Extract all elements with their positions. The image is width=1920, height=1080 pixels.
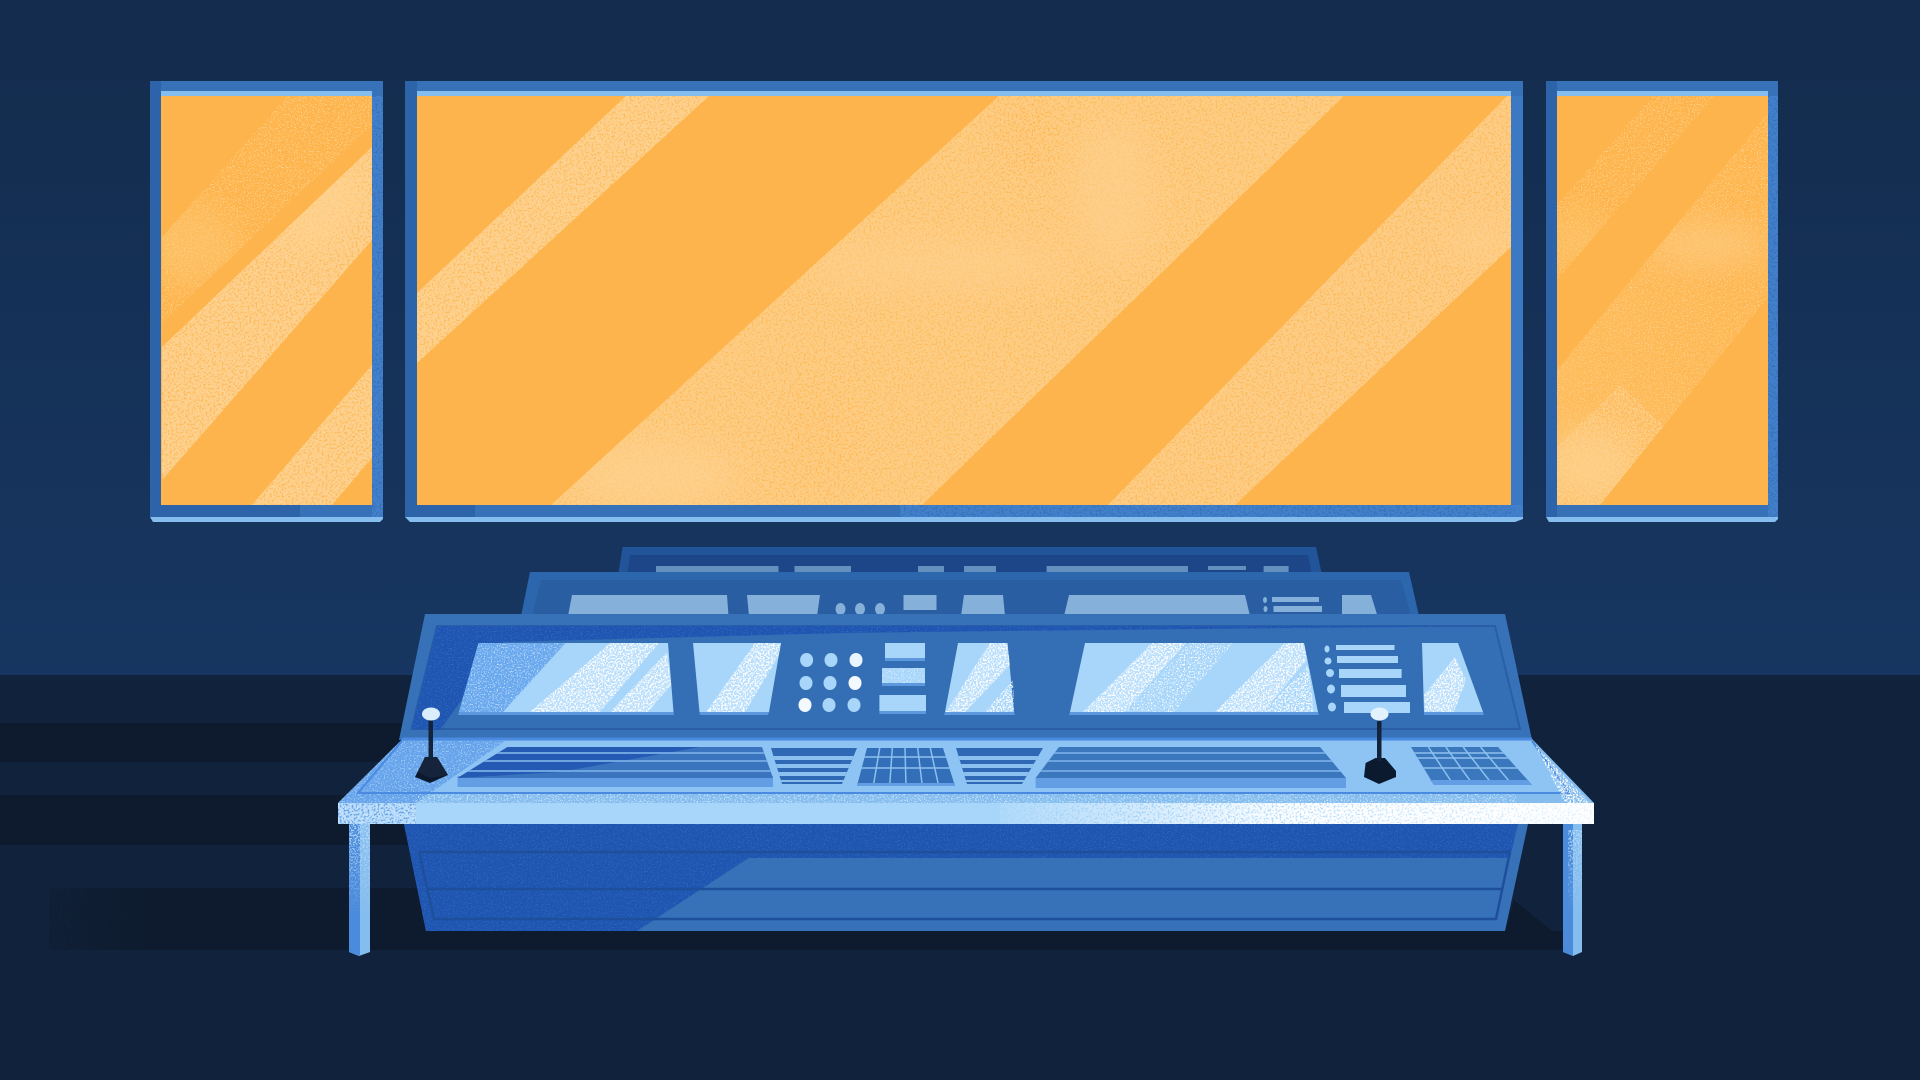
floor [0, 675, 1920, 1080]
striped pad: left [771, 748, 857, 784]
desk leg: left [349, 824, 370, 956]
back console: far row [618, 547, 1322, 575]
keyboard: right [1030, 747, 1350, 788]
floor shadow stripes [0, 723, 1563, 950]
screen: main left [458, 643, 674, 715]
screen: main wide [1069, 643, 1319, 715]
main console: upright panel [399, 614, 1532, 740]
indicator list [1324, 645, 1410, 713]
window: right [1541, 81, 1778, 522]
screen: main right [1422, 643, 1484, 715]
desk top surface [338, 739, 1594, 803]
desk leg: right [1563, 824, 1582, 956]
screen: main second [693, 643, 781, 715]
wall background [0, 0, 1920, 675]
grid pad: right [1411, 747, 1532, 785]
main console: front body [404, 824, 1528, 931]
screen: main third [944, 643, 1015, 715]
grid pad: centre [857, 748, 955, 786]
window: left [140, 81, 383, 522]
stacked buttons [879, 643, 926, 714]
indicator dots [798, 653, 862, 712]
keyboard: left [440, 747, 780, 787]
joystick: left [415, 708, 448, 783]
desk front edge [338, 803, 1594, 824]
joystick: right [1364, 708, 1396, 784]
back console: middle row [521, 572, 1419, 616]
window: centre [405, 81, 1523, 522]
striped pad: right [956, 748, 1043, 784]
